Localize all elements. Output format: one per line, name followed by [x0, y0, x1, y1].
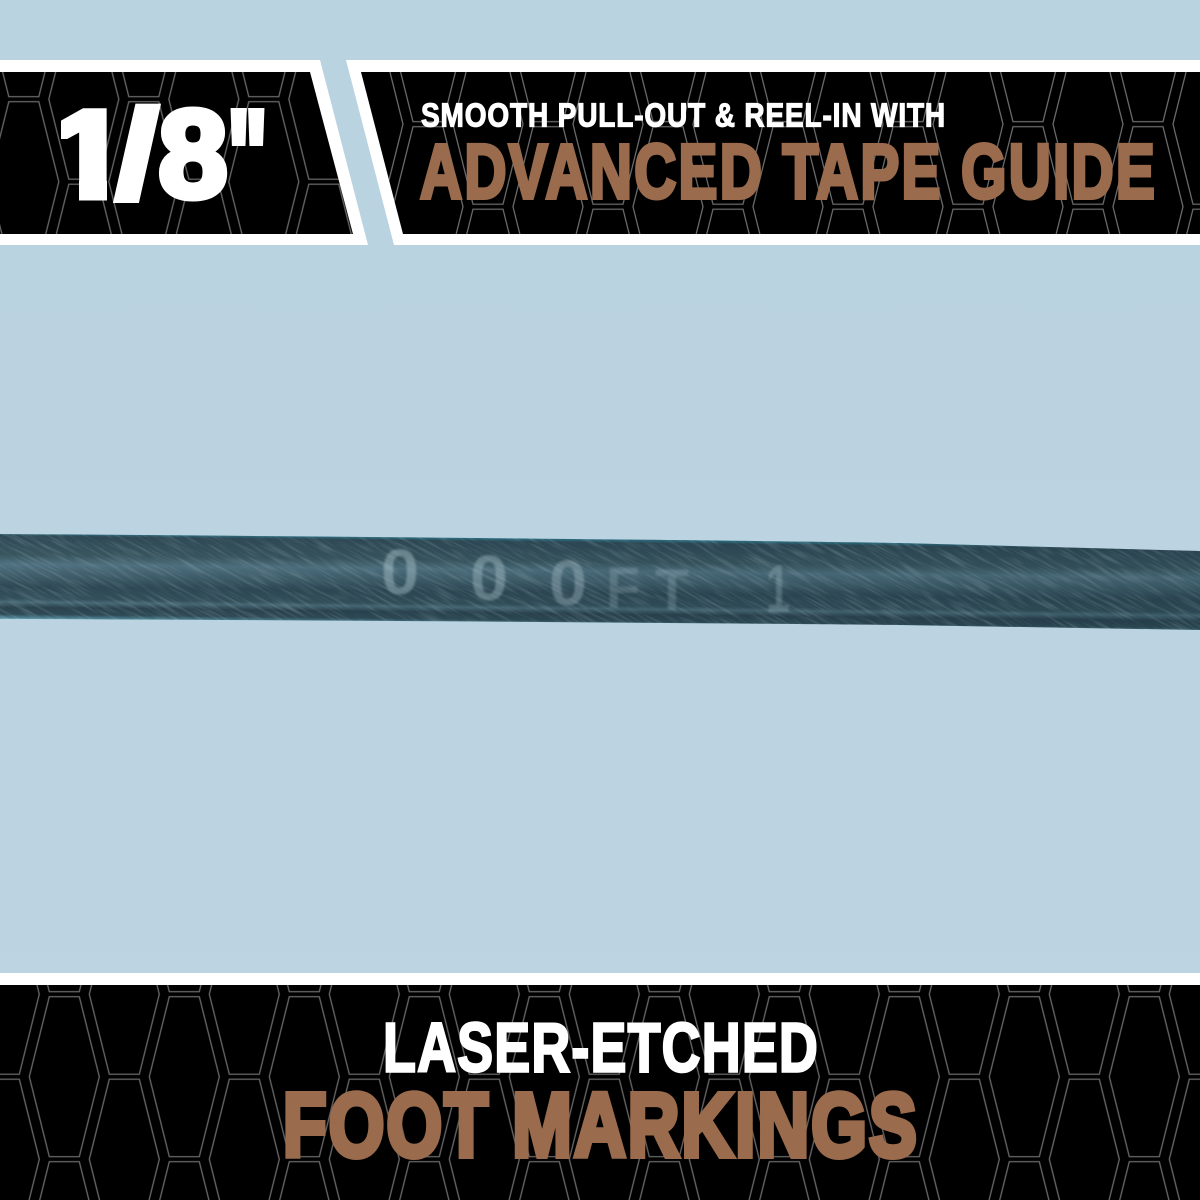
caption line two: FOOT MARKINGS: [283, 1076, 919, 1176]
size value: /: [116, 86, 158, 224]
size value: ": [228, 86, 268, 224]
photo: black tape with laser-etched markings: 1: [766, 551, 790, 627]
panel: top right feature banner: [346, 60, 1200, 245]
size value: 8: [158, 86, 228, 224]
photo: black tape with laser-etched markings: F: [606, 556, 640, 621]
photo: black tape with laser-etched markings: T: [655, 558, 689, 623]
photo: black tape with laser-etched markings: 0: [549, 547, 587, 619]
size value: 1: [50, 86, 129, 224]
panel: bottom caption banner: [0, 973, 1200, 1200]
feature subheading: SMOOTH PULL-OUT & REEL-IN WITH: [421, 96, 946, 134]
panel: top left size badge: [0, 60, 368, 245]
photo: black tape with laser-etched markings: 0: [470, 542, 508, 614]
photo: black tape with laser-etched markings: 0: [381, 536, 419, 608]
caption line one: LASER-ETCHED: [383, 1008, 819, 1086]
photo: black tape with laser-etched markings: [0, 534, 1200, 630]
size value: [61, 104, 264, 203]
